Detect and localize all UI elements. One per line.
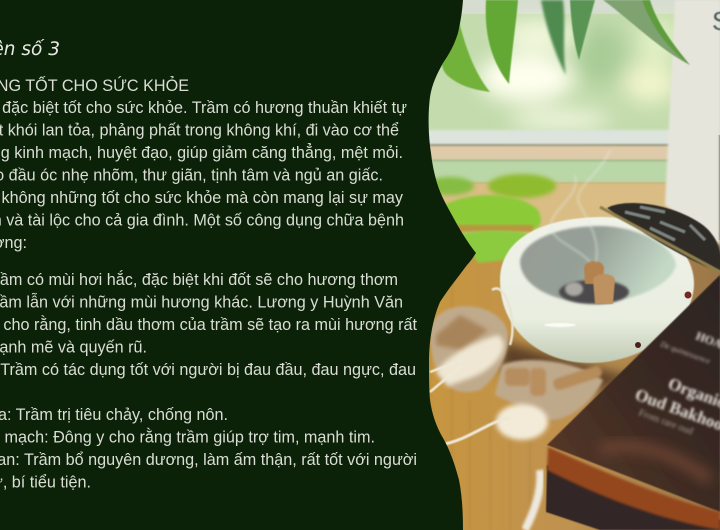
metal lid [600, 203, 720, 272]
box lettering: From rare oud [637, 407, 695, 437]
product box [546, 275, 720, 530]
ceramic bowl [500, 150, 694, 363]
smoke [551, 150, 610, 262]
red motifs [684, 292, 692, 298]
box lettering: De quintessence [658, 339, 712, 366]
green cushions [426, 174, 556, 263]
hanging leaves [442, 0, 690, 92]
blurred window background [420, 0, 720, 530]
incense cones [559, 261, 629, 304]
photo: incense burner on a wooden table [420, 0, 720, 530]
section: list of remedies [0, 270, 417, 492]
dark green text panel with wavy edge [0, 0, 476, 530]
box lettering [633, 329, 720, 437]
sachets of incense [430, 288, 603, 530]
white post [665, 0, 720, 245]
section: health benefits heading and paragraph [0, 75, 407, 252]
